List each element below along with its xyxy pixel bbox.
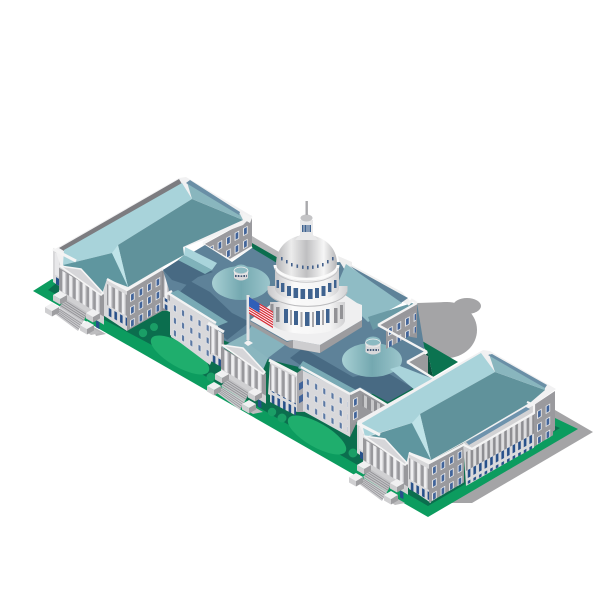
- back walls behind center: [250, 236, 412, 305]
- right wing facade: [357, 422, 431, 503]
- right back wall with windows: [378, 300, 433, 378]
- dome platform: [250, 295, 362, 353]
- upper drum with windows: [275, 268, 339, 301]
- light teal links: [184, 247, 217, 270]
- dome shell: [275, 235, 338, 282]
- mid ledge: [268, 286, 348, 307]
- left wing facade: [53, 248, 127, 331]
- center section: [163, 245, 433, 437]
- right wing roof: [357, 350, 556, 465]
- lawn oval left: [145, 328, 215, 382]
- dark roof panels: [163, 257, 213, 285]
- right wing end wall with windows: [534, 391, 555, 447]
- flag: [249, 297, 273, 328]
- left wing side wall with windows: [127, 269, 162, 331]
- lower drum: [270, 302, 345, 334]
- link roof to right wing: [390, 366, 436, 391]
- american flag: [244, 295, 273, 346]
- center facade left: [165, 290, 228, 368]
- left wing: [45, 177, 252, 335]
- lawn ground: [33, 279, 578, 517]
- right wing side wall with windows: [429, 443, 463, 503]
- right wing: [349, 350, 556, 505]
- small dome left: [212, 264, 270, 300]
- ground shadow: [92, 298, 593, 503]
- center facade right: [268, 360, 387, 437]
- flag pole: [244, 295, 253, 346]
- right portico with stairs: [349, 436, 408, 505]
- small dome right: [342, 336, 402, 377]
- left wing window wall notch: [203, 216, 252, 272]
- lawn oval right: [282, 408, 352, 462]
- center roof slate: [163, 245, 432, 395]
- lantern: [295, 201, 318, 240]
- center portico roof: [222, 333, 273, 370]
- right wing colonnade: [463, 405, 534, 486]
- left wing roof: [55, 177, 252, 296]
- center portico with stairs: [207, 345, 266, 414]
- left portico with stairs: [45, 266, 104, 335]
- central dome: [250, 201, 362, 353]
